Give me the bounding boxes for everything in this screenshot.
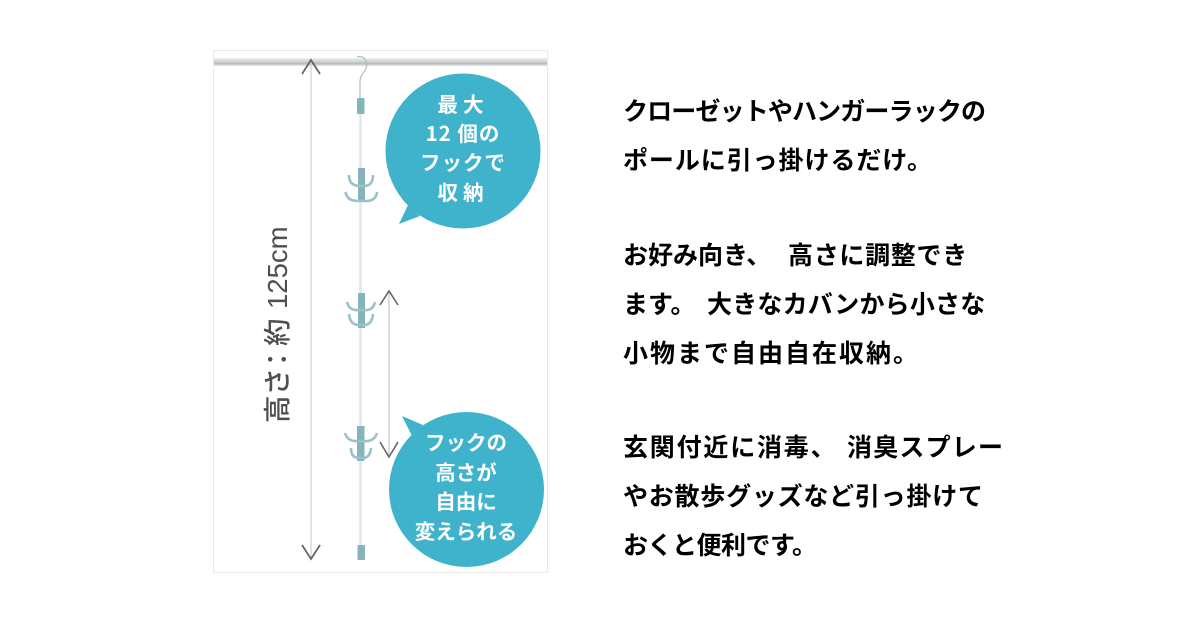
text block: usage: クローゼットやハンガーラックの bbox=[623, 92, 986, 128]
top stopper bbox=[357, 98, 364, 114]
icon: hook 1 bbox=[346, 168, 377, 202]
closet pole bbox=[214, 58, 547, 66]
text block: entrance use: やお散歩グッズなど引っ掛けて bbox=[623, 477, 983, 513]
callout: adjustable height: フックの bbox=[425, 426, 507, 456]
height label: ： bbox=[262, 346, 293, 373]
height label: 高さ bbox=[262, 368, 293, 423]
callout: up to 12 hooks: 収納 bbox=[438, 176, 488, 206]
text block: entrance use: おくと便利です。 bbox=[623, 526, 817, 562]
text block: entrance use: 消臭スプレー bbox=[847, 428, 1004, 464]
icon: hook 2 bbox=[347, 293, 375, 328]
callout: adjustable height: 変えられる bbox=[415, 515, 517, 545]
height label: 約 bbox=[262, 318, 293, 346]
text block: adjustable bbox=[623, 236, 985, 370]
adjustment arrow bbox=[380, 291, 398, 457]
height arrow bbox=[302, 60, 320, 559]
text block: entrance use bbox=[623, 428, 1004, 562]
text block: usage: ポールに引っ掛けるだけ。 bbox=[623, 141, 932, 177]
icon: hook 3 bbox=[345, 426, 377, 461]
text block: adjustable: 小物まで自由自在収納。 bbox=[623, 334, 920, 370]
panel: product illustration bbox=[214, 50, 548, 572]
callout: adjustable height bbox=[389, 412, 544, 567]
height label: 125cm bbox=[262, 226, 293, 309]
callout: adjustable height: 高さが bbox=[435, 456, 497, 486]
text block: usage bbox=[623, 92, 986, 177]
hanging rope with hook bbox=[357, 56, 367, 560]
text block: entrance use: 玄関付近に消毒、 bbox=[623, 428, 837, 464]
callout: up to 12 hooks: 12 個の bbox=[426, 117, 500, 147]
text block: adjustable: ます。 bbox=[623, 285, 696, 321]
bottom weight bbox=[358, 545, 365, 560]
callout: adjustable height: 自由に bbox=[435, 485, 497, 515]
callout: up to 12 hooks: フックで bbox=[420, 146, 506, 176]
text block: adjustable: お好み向き、 bbox=[623, 236, 771, 272]
text block: adjustable: 大きなカバンから小さな bbox=[707, 285, 985, 321]
text block: adjustable: 高さに調整でき bbox=[788, 236, 968, 272]
callout: up to 12 hooks: 最大 bbox=[438, 88, 488, 118]
callout: up to 12 hooks bbox=[386, 74, 540, 228]
